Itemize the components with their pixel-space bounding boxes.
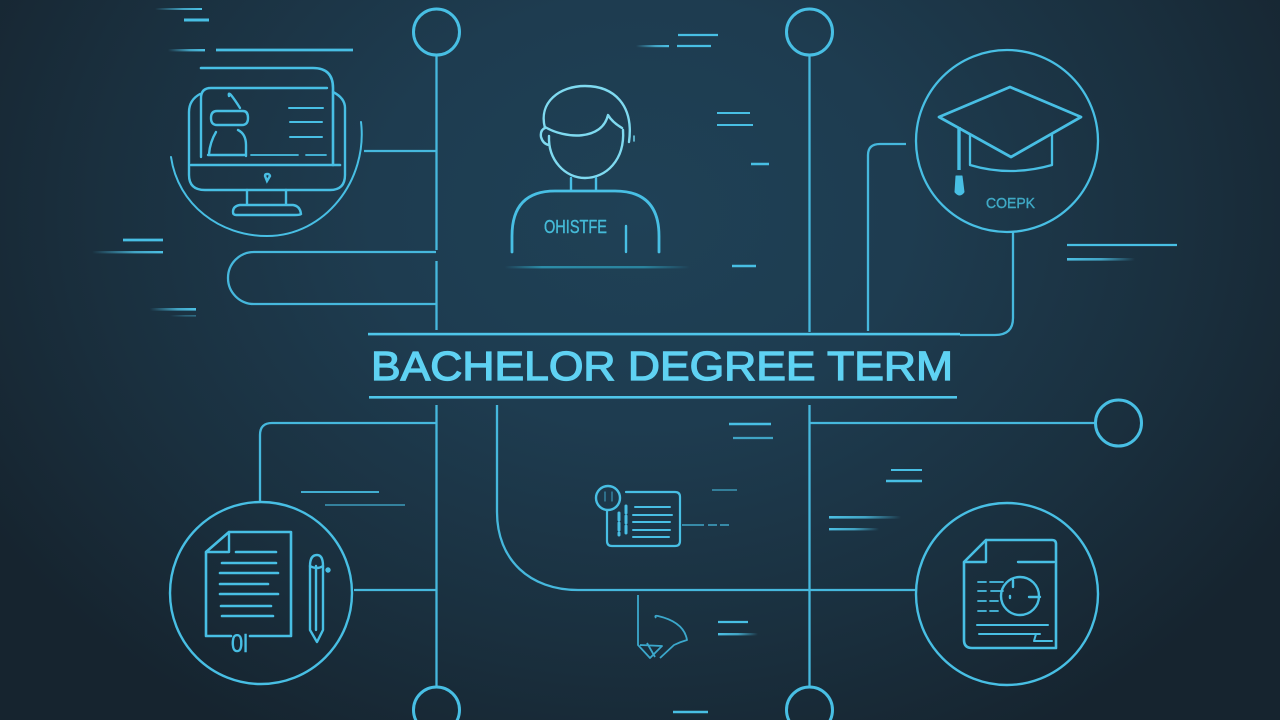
icon: graduation cap <box>916 50 1098 232</box>
title: BACHELOR DEGREE TERM <box>371 343 953 389</box>
icon: report document <box>916 503 1098 685</box>
icon: mini clipboard list <box>596 486 680 546</box>
icon: computer monitor <box>171 68 362 236</box>
icon: small hand-drawn mark <box>638 595 687 658</box>
node circles <box>414 9 1142 720</box>
icon: document and pen <box>170 502 352 684</box>
connector network <box>228 55 1095 687</box>
shirt label: OHISTFE <box>544 217 607 237</box>
cap caption: COEPK <box>986 195 1035 212</box>
underline glow below person <box>505 266 690 268</box>
pen <box>310 555 323 642</box>
person icon <box>512 86 659 252</box>
page number: 0l <box>231 630 248 658</box>
